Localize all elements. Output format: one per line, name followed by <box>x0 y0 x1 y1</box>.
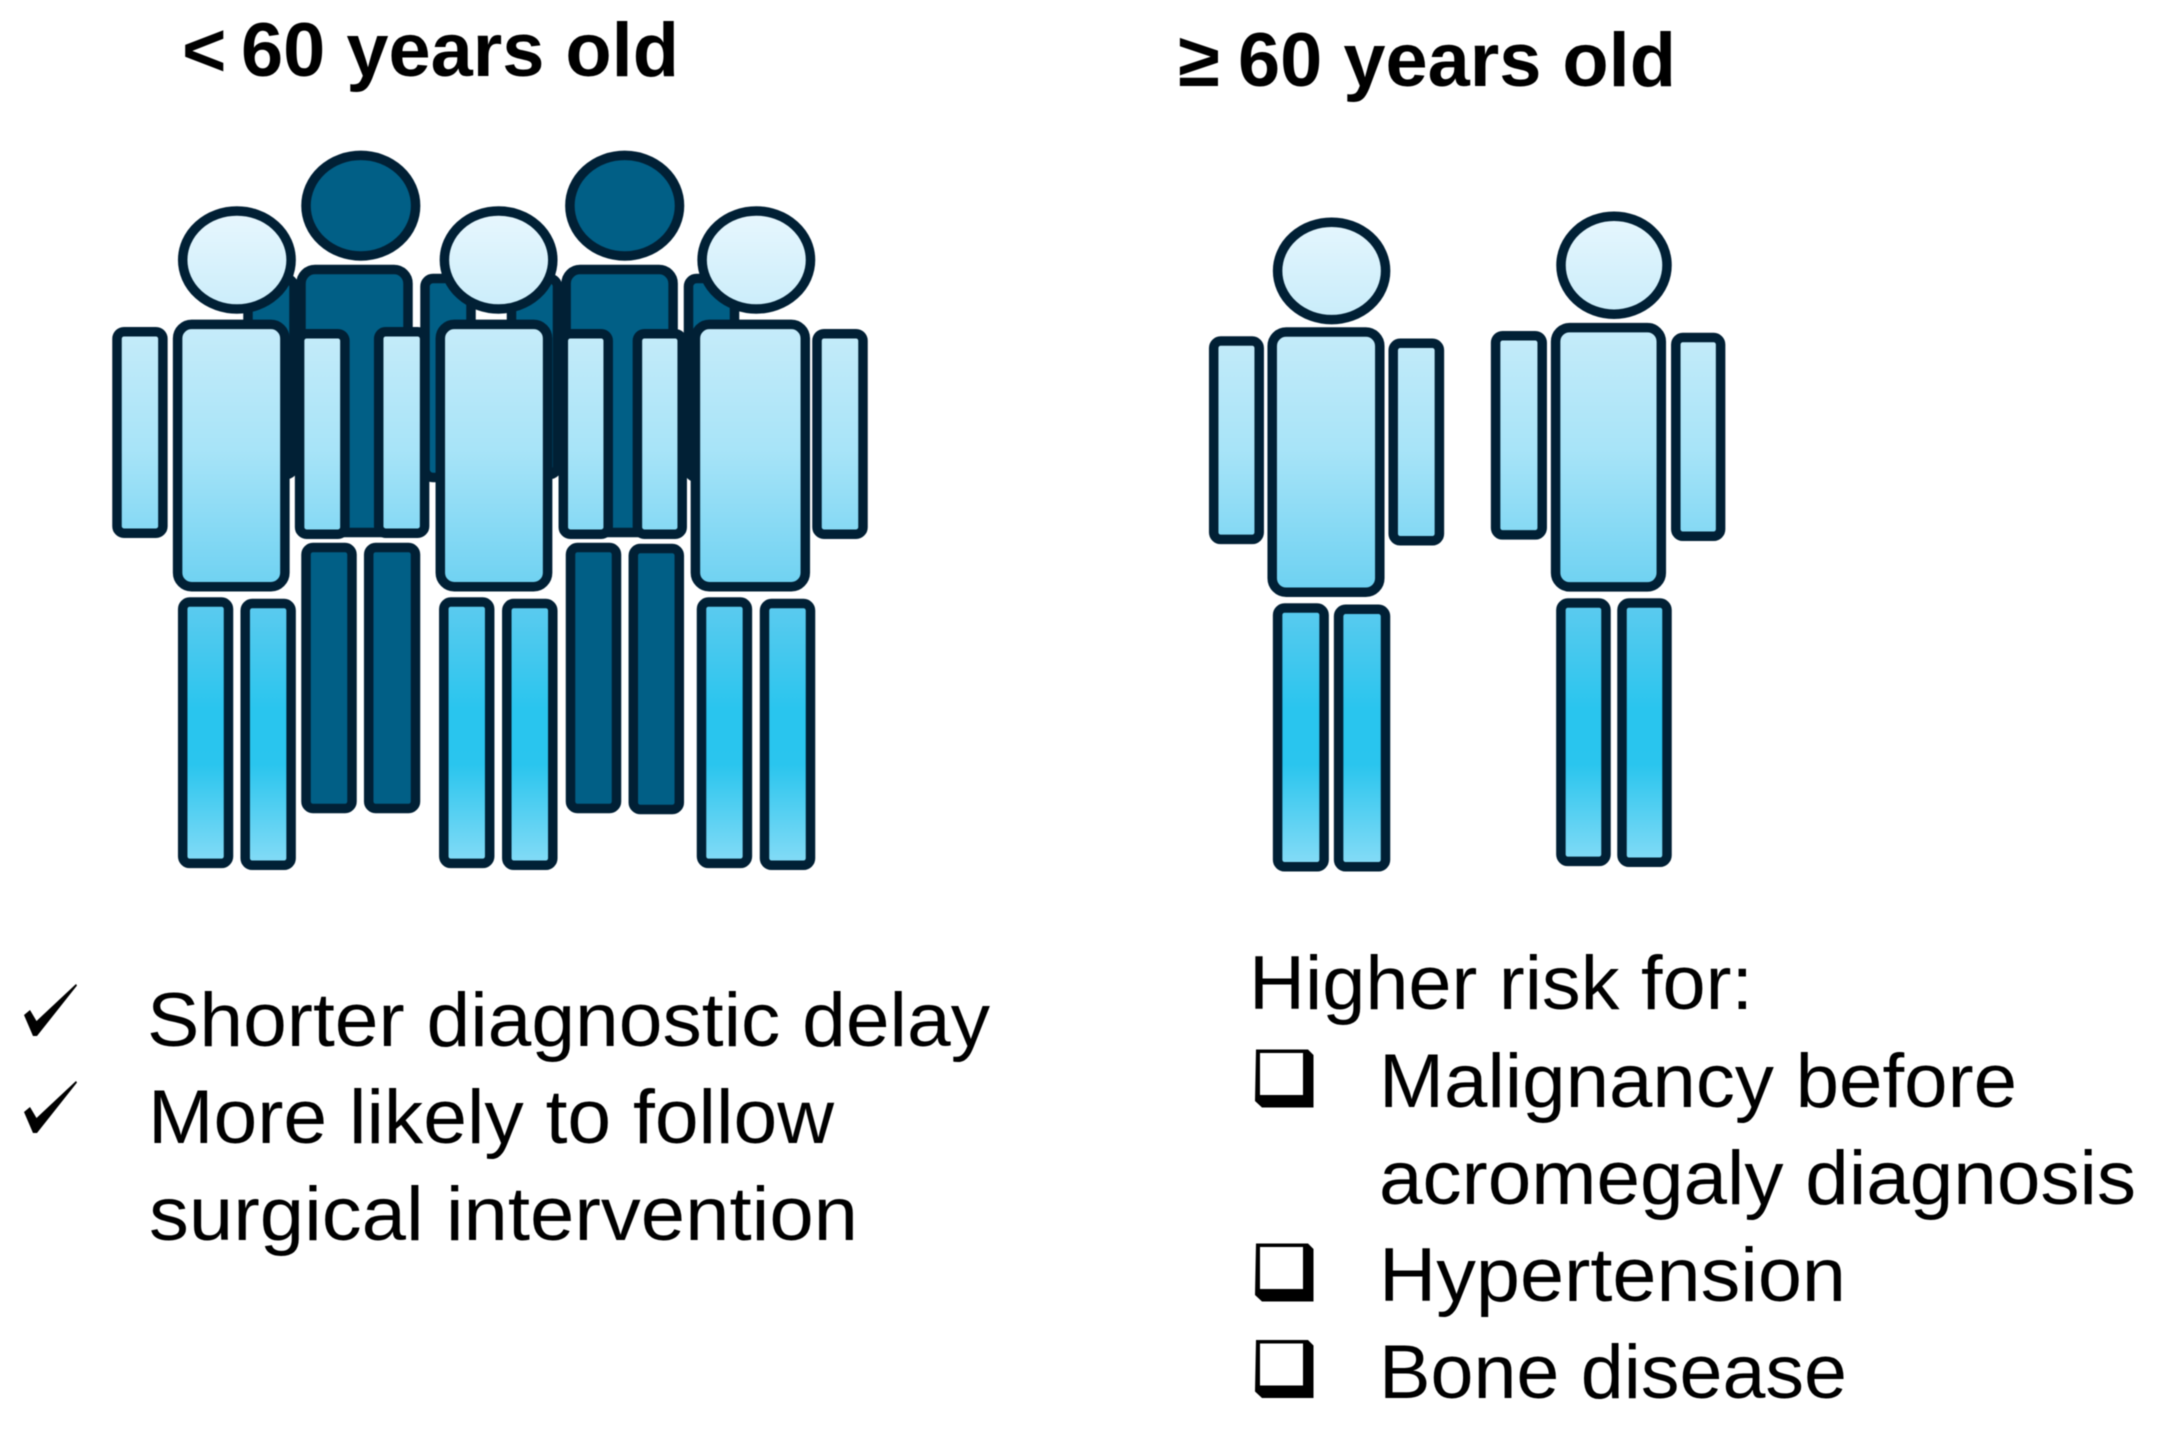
text: shorter diagnostic delay: Shorter diagnostic delay <box>147 978 990 1063</box>
person: dark back left <box>248 155 471 808</box>
person: light front left <box>117 211 345 865</box>
group of two people, 60 or older <box>1214 216 1721 867</box>
icon: checkbox one <box>1255 1050 1314 1108</box>
heading: 60 years old or more: 60 years old <box>1238 18 1676 103</box>
text: more likely to follow: More likely to follow <box>148 1075 835 1160</box>
group of five people, under 60 <box>117 155 863 865</box>
text: acromegaly diagnosis: acromegaly diagnosis <box>1379 1136 2136 1221</box>
text: hypertension: Hypertension <box>1379 1233 1846 1318</box>
person: older left <box>1214 222 1439 867</box>
heading: under 60 years old: 60 years old <box>241 8 679 93</box>
text: surgical intervention: surgical intervention <box>149 1172 858 1257</box>
list: benefits under 60 <box>24 978 990 1257</box>
icon: check mark one <box>24 984 77 1036</box>
text: bone disease: Bone disease <box>1379 1330 1847 1415</box>
heading: 60 years old or more: ≥ <box>1178 18 1220 103</box>
icon: checkbox three <box>1255 1340 1314 1398</box>
icon: check mark two <box>24 1081 77 1133</box>
person: light front right <box>637 211 863 865</box>
icon: checkbox two <box>1255 1244 1314 1302</box>
text: higher risk for: Higher risk for: <box>1249 941 1753 1026</box>
heading: under 60 years old: < <box>182 8 226 93</box>
list: risks at 60 or older <box>1249 941 2136 1415</box>
person: dark back right <box>512 155 734 809</box>
person: older right <box>1496 216 1721 862</box>
person: light front centre <box>379 211 608 865</box>
text: malignancy before: Malignancy before <box>1379 1039 2017 1124</box>
